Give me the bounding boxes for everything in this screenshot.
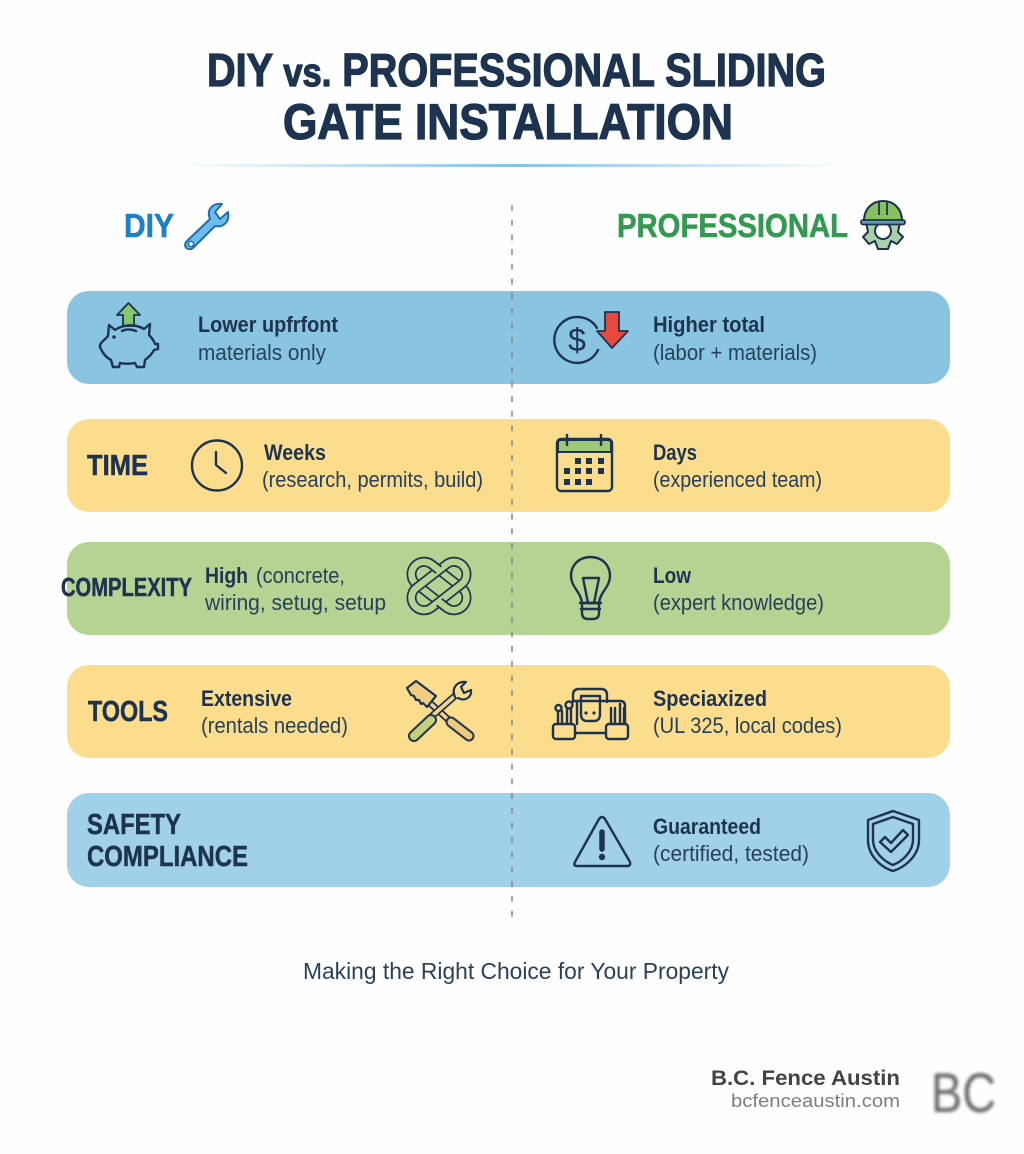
text: DIY cost (198, 312, 339, 365)
icon: light bulb (571, 557, 610, 619)
text: DIY tools: (rentals needed) (201, 713, 348, 738)
text: DIY complexity: High (205, 563, 248, 588)
icon: piggy bank with up arrow (100, 303, 158, 367)
text: professional complexity: Low (653, 563, 692, 588)
icon: clock (192, 440, 242, 490)
logo: blurred BC: BC (931, 1061, 996, 1124)
text: DIY complexity: wiring, setug, setup (204, 590, 386, 615)
panel: complexity row (67, 542, 950, 635)
footer brand text: B.C. Fence Austin (711, 1067, 900, 1090)
text: professional time (653, 440, 822, 492)
label: TIME: TIME (87, 450, 148, 482)
label: SAFETY COMPLIANCE (87, 809, 248, 873)
icon: shield with check (868, 811, 919, 871)
icon: crossed tools (407, 681, 471, 736)
icon: calendar (557, 435, 612, 491)
title (207, 44, 826, 150)
text: professional tools (653, 686, 842, 738)
text: DIY time (262, 440, 483, 492)
text: professional cost: Higher total (653, 312, 765, 337)
label: SAFETY COMPLIANCE: SAFETY (87, 809, 181, 841)
heading: PROFESSIONAL: PROFESSIONAL (617, 207, 848, 244)
panel: cost row (67, 291, 950, 384)
text: professional time: Days (653, 440, 697, 465)
icon: warning triangle (574, 817, 630, 866)
icon: wrench (185, 204, 228, 249)
label: SAFETY COMPLIANCE: COMPLIANCE (87, 841, 248, 873)
footer brand text (711, 1067, 900, 1111)
icon: dollar with down arrow: $ (568, 322, 586, 358)
panel: safety compliance row (67, 793, 950, 887)
text: professional complexity: (expert knowledge) (653, 590, 824, 615)
panel: time row (67, 419, 950, 512)
text: professional safety: Guaranteed (653, 814, 761, 839)
panel: tools row (67, 665, 950, 758)
text: professional safety: (certified, tested) (653, 841, 809, 866)
icon: hard hat and gear (861, 201, 905, 249)
text: DIY tools: Extensive (201, 686, 292, 711)
text: professional tools: (UL 325, local codes) (653, 713, 842, 738)
text: professional complexity (653, 563, 824, 615)
text: DIY complexity: (concrete, (256, 563, 345, 588)
label: COMPLEXITY: COMPLEXITY (61, 572, 192, 602)
heading: DIY: DIY (124, 207, 174, 244)
icon: dollar with down arrow (554, 312, 628, 363)
text: professional safety (653, 814, 809, 866)
title: DIY vs. PROFESSIONAL SLIDING (207, 44, 826, 96)
icon: knot (406, 557, 472, 615)
text: DIY cost: Lower upfrfont (198, 312, 339, 337)
text: professional cost: (labor + materials) (653, 340, 817, 365)
text: DIY time: Weeks (264, 440, 326, 465)
label: TOOLS: TOOLS (88, 696, 168, 728)
text: professional tools: Speciaxized (653, 686, 767, 711)
text: professional cost (653, 312, 817, 365)
text: DIY time: (research, permits, build) (262, 467, 483, 492)
title: GATE INSTALLATION (283, 94, 733, 150)
text: DIY complexity (204, 563, 386, 615)
text: professional time: (experienced team) (653, 467, 822, 492)
text: DIY cost: materials only (198, 340, 326, 365)
icon: professional tool kit (553, 689, 628, 739)
text: DIY tools (201, 686, 348, 738)
footer brand text: bcfenceaustin.com (731, 1091, 900, 1111)
caption: Making the Right Choice for Your Property (303, 958, 729, 984)
